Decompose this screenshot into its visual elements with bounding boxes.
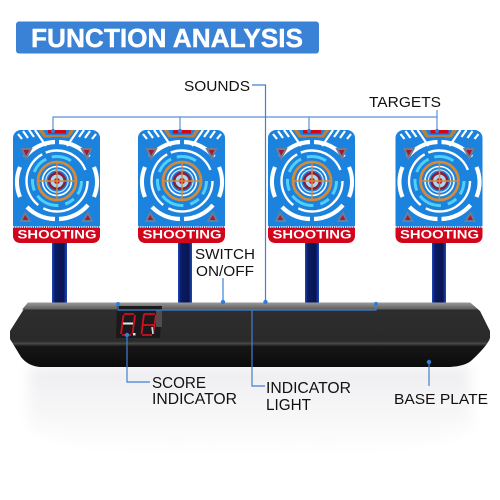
title banner: FUNCTION ANALYSIS: [31, 23, 303, 53]
target 4: [396, 130, 482, 243]
target 2: SHOOTING: [142, 230, 222, 242]
callout: switch leader: [221, 278, 225, 304]
callout: score leader: [125, 333, 150, 382]
callout: indicator light leader: [116, 302, 378, 386]
label: switch on/off: SWITCH: [195, 246, 255, 263]
label: score indicator: INDICATOR: [152, 391, 237, 408]
base plate: [10, 302, 490, 367]
floor reflection: [28, 366, 472, 455]
poles: [52, 243, 446, 305]
label: sounds: SOUNDS: [184, 78, 250, 95]
target 1: SHOOTING: [18, 230, 97, 242]
target 2: [138, 130, 225, 243]
target 3: [268, 130, 355, 243]
label: indicator light: LIGHT: [266, 397, 312, 414]
targets row: [13, 130, 482, 243]
target 1: [13, 130, 100, 243]
target 4: SHOOTING: [400, 230, 479, 242]
label: switch on/off: ON/OFF: [196, 263, 254, 280]
label: score indicator: SCORE: [152, 375, 206, 392]
callout: base plate leader: [427, 360, 431, 386]
label: indicator light: INDICATOR: [266, 380, 351, 397]
score display: [116, 306, 162, 338]
callout: sounds leader: [252, 85, 268, 304]
label: targets: TARGETS: [369, 94, 441, 111]
callout: targets leader lines: [51, 110, 439, 133]
label: base plate: BASE PLATE: [394, 391, 488, 408]
target 3: SHOOTING: [272, 230, 352, 242]
